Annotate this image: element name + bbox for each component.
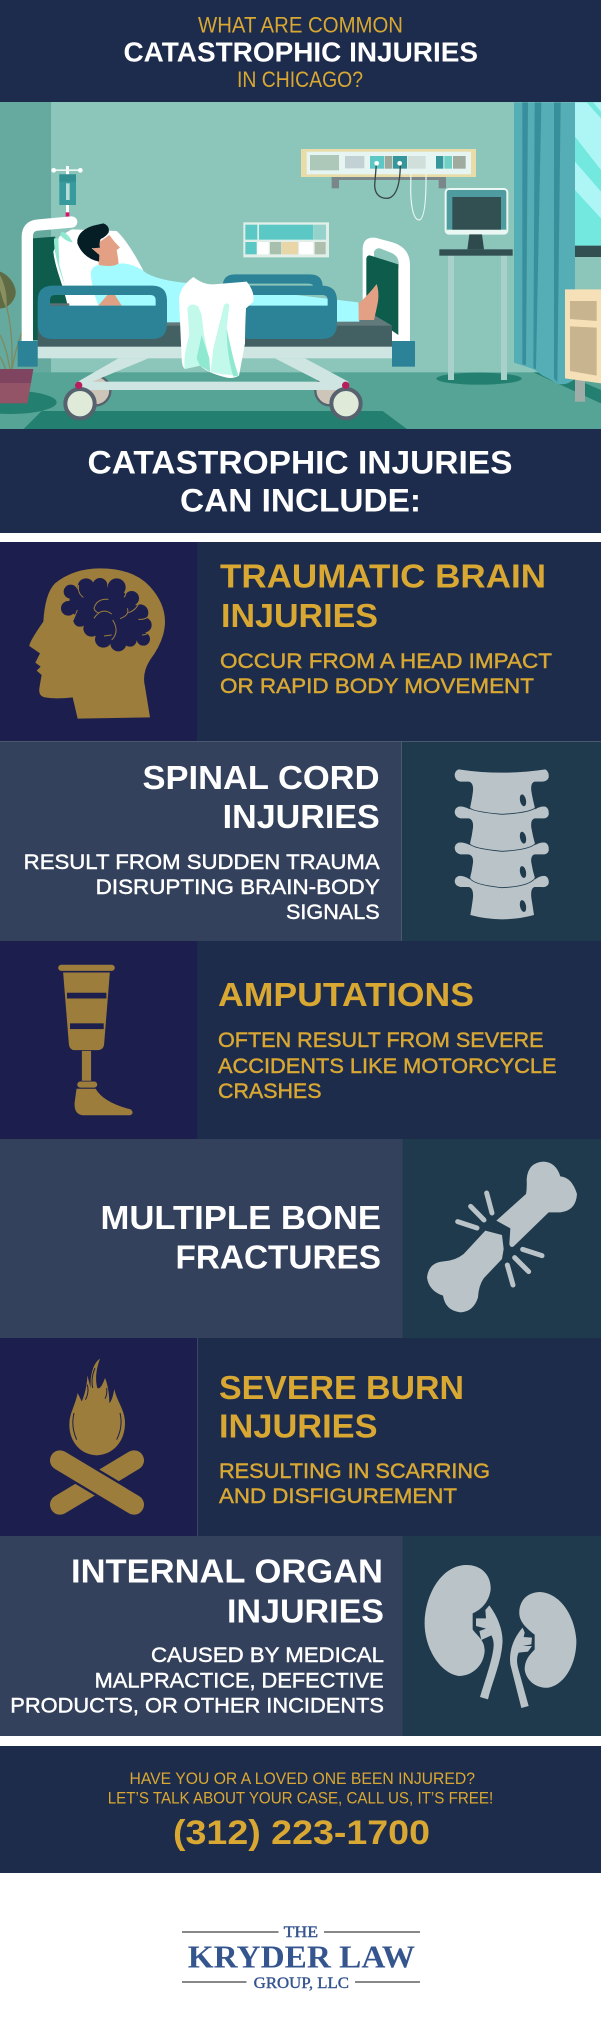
illustration: hospital room with patient in bed: [0, 95, 601, 432]
heading: catastrophic injuries can include: CATASTROPHIC INJURIES: [88, 444, 512, 480]
text: multiple bone fractures: MULTIPLE BONE: [100, 1199, 381, 1236]
icon: patient: [53, 223, 378, 322]
panel: call to action: [0, 1746, 601, 1873]
neck and face: [99, 252, 119, 266]
text: call to action: LET’S TALK ABOUT YOUR CASE, CALL US, IT’S FREE!: [108, 1788, 493, 1807]
text: traumatic brain injuries: OR RAPID BODY MOVEMENT: [220, 674, 534, 698]
heading: in chicago: IN CHICAGO?: [237, 67, 363, 92]
text: spinal cord injuries: RESULT FROM SUDDEN TRAUMA: [24, 850, 380, 874]
text: spinal cord injuries: [24, 759, 380, 924]
text: traumatic brain injuries: INJURIES: [221, 597, 378, 634]
icon: bed corner blocks: [18, 341, 415, 367]
icon: kidneys: [425, 1565, 576, 1708]
icon: front bed wheels: [65, 382, 361, 418]
panel: amputations: [0, 941, 601, 1139]
foot: [359, 284, 378, 320]
text: amputations: CRASHES: [218, 1079, 322, 1103]
logo: the kryder law group: [182, 1924, 420, 1992]
text: internal organ injuries: [10, 1553, 384, 1717]
heading: catastrophic injuries: CATASTROPHIC INJURIES: [124, 37, 478, 68]
text: multiple bone fractures: FRACTURES: [176, 1238, 381, 1276]
icon: spine: [455, 769, 549, 919]
heading: catastrophic injuries can include: CAN INCLUDE:: [180, 483, 421, 519]
logo: the kryder law group: KRYDER LAW: [188, 1938, 415, 1974]
text: internal organ injuries: PRODUCTS, OR OTHER INCIDENTS: [10, 1693, 384, 1717]
icon: wall control panel: [243, 222, 329, 257]
text: internal organ injuries: INJURIES: [227, 1593, 384, 1630]
panel: spinal cord injuries: [0, 741, 601, 941]
icon: near right rail: [235, 286, 337, 339]
icon: wall unit with cables: [301, 149, 476, 220]
phone number: (312) 223-1700: [173, 1814, 430, 1852]
icon: rear bed wheels: [81, 376, 345, 405]
text: spinal cord injuries: INJURIES: [223, 798, 380, 835]
text: call to action: [108, 1769, 493, 1807]
text: call to action: HAVE YOU OR A LOVED ONE BEEN INJURED?: [130, 1769, 475, 1788]
icon: campfire: [60, 1359, 134, 1505]
pillow: [53, 229, 143, 308]
icon: blanket: [179, 277, 254, 378]
wall: [0, 95, 601, 432]
heading: what are common: WHAT ARE COMMON: [198, 12, 403, 38]
icon: bed base and frame: [38, 315, 392, 390]
icon: bed headboard: [27, 222, 72, 343]
text: severe burn injuries: SEVERE BURN: [219, 1369, 464, 1406]
body: [91, 263, 359, 322]
text: spinal cord injuries: DISRUPTING BRAIN-BODY: [96, 875, 380, 899]
text: amputations: ACCIDENTS LIKE MOTORCYCLE: [218, 1054, 556, 1078]
panel: banner: [0, 429, 601, 533]
hair: [77, 223, 109, 262]
text: severe burn injuries: AND DISFIGUREMENT: [219, 1484, 457, 1508]
text: traumatic brain injuries: [220, 558, 552, 698]
text: severe burn injuries: [219, 1369, 490, 1508]
icon: far rail: [223, 274, 323, 295]
text: internal organ injuries: MALPRACTICE, DEFECTIVE: [95, 1668, 384, 1692]
text: severe burn injuries: RESULTING IN SCARRING: [219, 1459, 490, 1483]
text: internal organ injuries: INTERNAL ORGAN: [71, 1553, 383, 1590]
heading: catastrophic injuries can include: [88, 444, 512, 519]
logo: the kryder law group: GROUP, LLC: [254, 1975, 349, 1992]
text: traumatic brain injuries: TRAUMATIC BRAIN: [220, 558, 546, 594]
text: multiple bone fractures: [100, 1199, 381, 1276]
panel: traumatic brain injuries: [0, 542, 601, 741]
text: amputations: AMPUTATIONS: [218, 976, 474, 1013]
icon: monitor on table: [436, 189, 522, 385]
icon: footboard: [363, 238, 410, 342]
icon: near left rail: [38, 286, 167, 339]
logo: the kryder law group: THE: [284, 1924, 318, 1941]
icon: plant: [0, 272, 57, 414]
icon: head with brain: [29, 568, 165, 719]
text: amputations: OFTEN RESULT FROM SEVERE: [218, 1028, 544, 1052]
icon: iv drip stand: [51, 166, 83, 217]
text: spinal cord injuries: SIGNALS: [286, 900, 380, 924]
icon: broken bone: [427, 1162, 577, 1312]
text: severe burn injuries: INJURIES: [219, 1408, 378, 1445]
panel: header: [0, 0, 601, 102]
icon: curtain: [514, 102, 575, 384]
icon: bedside cabinet: [565, 289, 601, 402]
floor: [0, 372, 601, 432]
panel: severe burn injuries: [0, 1338, 601, 1536]
arm: [98, 295, 122, 306]
panel: multiple bone fractures: [0, 1139, 601, 1338]
text: traumatic brain injuries: OCCUR FROM A HEAD IMPACT: [220, 649, 552, 673]
icon: prosthetic leg: [58, 965, 133, 1115]
panel: internal organ injuries: [0, 1536, 601, 1736]
text: spinal cord injuries: SPINAL CORD: [142, 759, 380, 796]
icon: window: [575, 102, 601, 257]
text: amputations: [218, 976, 556, 1103]
text: internal organ injuries: CAUSED BY MEDICAL: [151, 1643, 384, 1667]
